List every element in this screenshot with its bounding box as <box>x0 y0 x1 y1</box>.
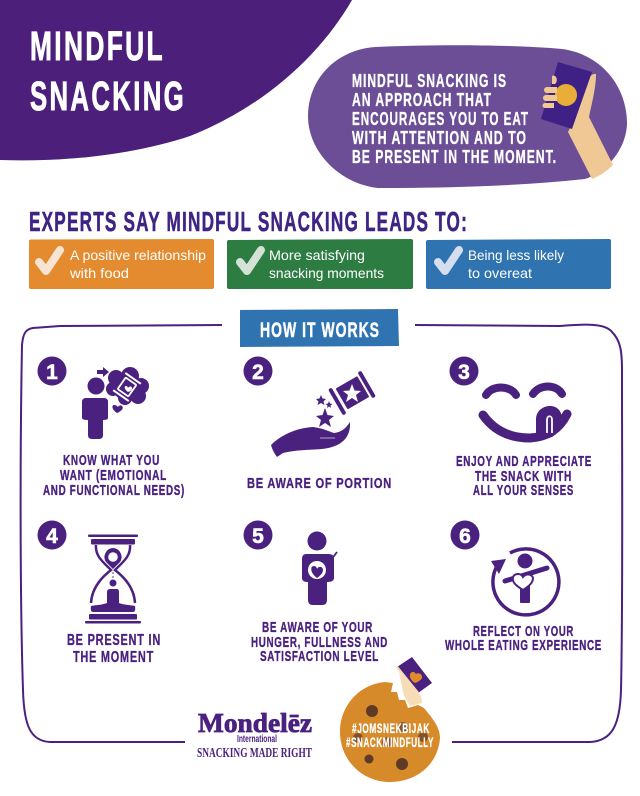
logo: Mondelez International: International <box>237 734 277 745</box>
icon: hand with snack and stars <box>271 371 376 457</box>
panel: benefit positive relationship: A positive relationship <box>70 247 206 263</box>
panel: definition callout: AN APPROACH THAT <box>352 90 492 110</box>
panel: definition callout <box>308 45 627 188</box>
number 4: 4 <box>46 525 58 548</box>
panel: benefit positive relationship <box>29 239 214 289</box>
label 4: BE PRESENT IN <box>67 632 161 649</box>
icon: hourglass with meditating person <box>85 534 141 624</box>
panel: benefit positive relationship: with food <box>69 265 129 281</box>
label 1 <box>43 453 185 499</box>
panel: benefit less overeating: Being less likely <box>468 247 564 263</box>
number 5: 5 <box>252 525 264 548</box>
step 5 <box>244 520 388 665</box>
logo: Mondelez International <box>197 708 312 760</box>
panel: benefit satisfying moments: snacking moments <box>269 265 384 281</box>
label 2: BE AWARE OF PORTION <box>247 476 392 492</box>
title banner: MINDFUL <box>30 23 165 69</box>
label 3 <box>456 454 592 499</box>
label 5: BE AWARE OF YOUR <box>262 620 373 636</box>
icon: smiling face with tongue <box>483 386 567 441</box>
label 3: ALL YOUR SENSES <box>473 483 574 499</box>
label 5: HUNGER, FULLNESS AND <box>251 635 388 651</box>
number 3: 3 <box>458 361 470 384</box>
number 5 <box>244 520 272 550</box>
panel: definition callout: MINDFUL SNACKING IS <box>352 71 507 91</box>
panel: benefit less overeating <box>426 239 611 289</box>
heading: how it works: HOW IT WORKS <box>260 319 380 342</box>
number 4 <box>38 520 66 550</box>
icon: hand and snack above cookie <box>340 657 440 782</box>
label 1: AND FUNCTIONAL NEEDS) <box>43 483 185 499</box>
label 6: REFLECT ON YOUR <box>473 624 574 640</box>
label 5 <box>251 620 388 665</box>
panel: definition callout: WITH ATTENTION AND TO <box>352 128 527 148</box>
step 1 <box>38 356 185 499</box>
panel: benefit satisfying moments <box>227 239 413 289</box>
label 4: THE MOMENT <box>73 649 154 666</box>
icon: person thinking of snack <box>82 367 149 439</box>
step 4 <box>38 520 161 666</box>
step 3 <box>450 356 592 499</box>
number 3 <box>450 356 478 386</box>
icon: bitten cookie with hashtags: #SNACKMINDFULLY <box>346 735 434 750</box>
title banner <box>0 0 352 160</box>
label 4 <box>67 632 161 666</box>
panel: definition callout: ENCOURAGES YOU TO EAT <box>352 109 529 129</box>
number 2 <box>244 356 272 386</box>
label 1: KNOW WHAT YOU <box>63 453 160 469</box>
number 2: 2 <box>252 361 264 384</box>
panel: benefit less overeating: to overeat <box>468 265 532 281</box>
icon: person with heart and check <box>302 532 337 605</box>
label 1: WANT (EMOTIONAL <box>60 468 167 484</box>
panel frame: how it works <box>21 325 622 742</box>
number 6: 6 <box>459 525 471 548</box>
step 2 <box>244 356 392 492</box>
number 1 <box>38 356 66 386</box>
logo: Mondelez International: SNACKING MADE RIGHT <box>197 745 312 760</box>
number 6 <box>450 520 480 550</box>
logo: Mondelez International: Mondelēz <box>198 708 312 738</box>
label 6 <box>445 624 602 654</box>
heading: how it works <box>240 309 399 347</box>
label 3: THE SNACK WITH <box>475 469 572 485</box>
step 6 <box>445 520 602 654</box>
panel: benefit satisfying moments: More satisfying <box>269 247 365 263</box>
title banner: SNACKING <box>30 73 186 119</box>
icon: bitten cookie with hashtags <box>340 657 440 782</box>
label 5: SATISFACTION LEVEL <box>260 649 379 665</box>
icon: bitten cookie with hashtags: #JOMSNEKBIJAK <box>352 721 430 736</box>
number 1: 1 <box>46 361 58 384</box>
icon: person with heart in circular arrow <box>491 549 559 615</box>
icon: hand holding snack <box>541 62 613 179</box>
